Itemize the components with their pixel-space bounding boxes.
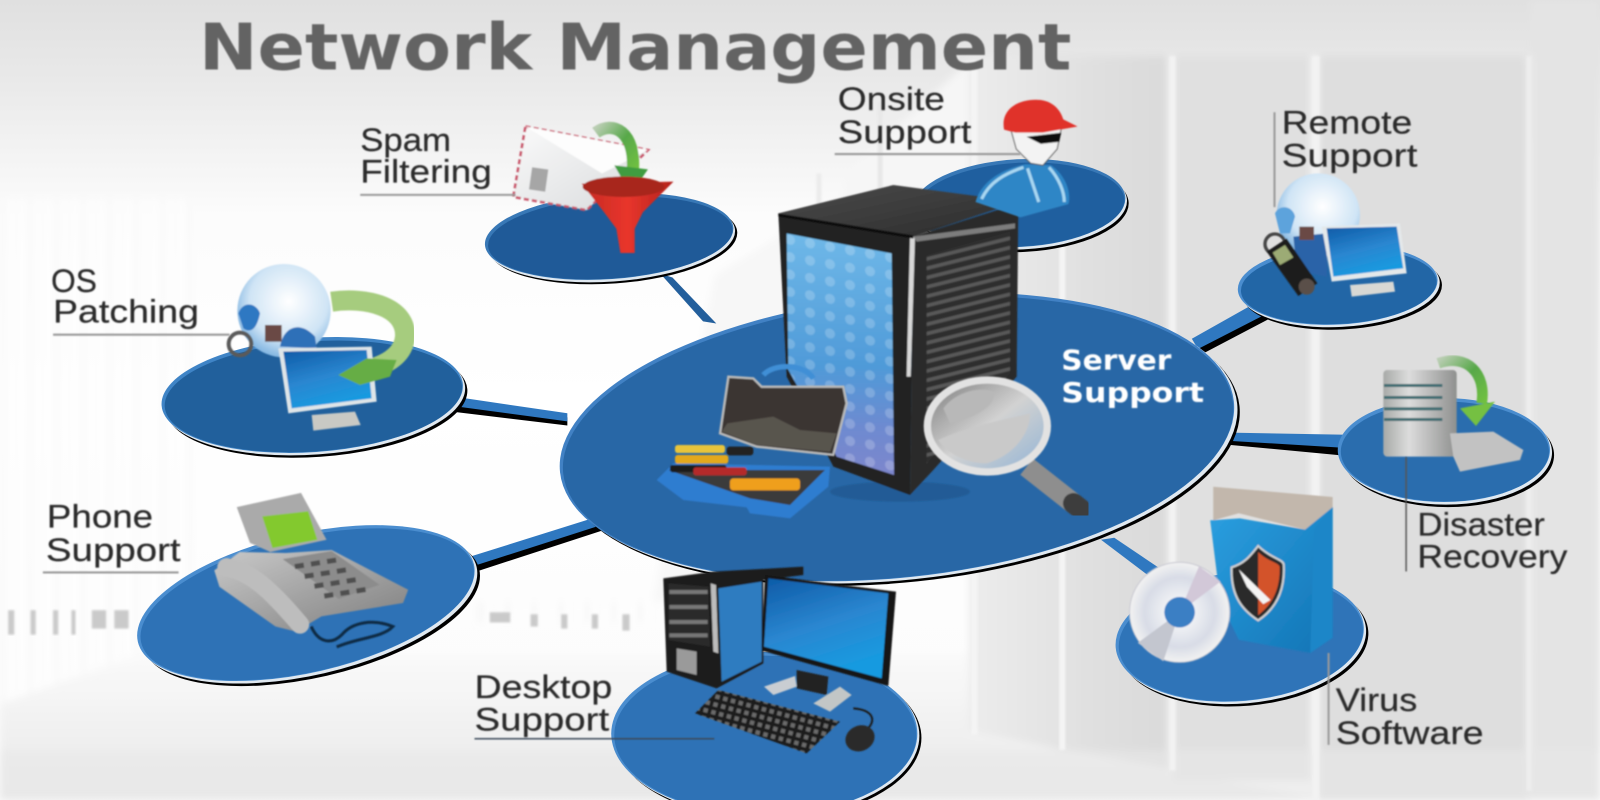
label: OS Patching: OS bbox=[51, 262, 97, 299]
panel: OS patching disc bbox=[158, 327, 471, 468]
connector: disaster recovery to server bbox=[1230, 433, 1347, 455]
label: Remote Support: Support bbox=[1282, 136, 1417, 173]
icon: remote support globe, phone and monitor bbox=[1265, 173, 1407, 297]
label: Phone Support: Phone bbox=[47, 498, 153, 535]
panel: desktop support disc bbox=[611, 652, 921, 800]
label: Disaster Recovery: Disaster bbox=[1417, 506, 1545, 543]
icon: OS patching globe, monitor and arrow bbox=[229, 264, 405, 431]
label: Disaster Recovery: Recovery bbox=[1417, 537, 1568, 574]
label: Spam Filtering: Filtering bbox=[360, 153, 492, 190]
label: Disaster Recovery bbox=[1406, 457, 1568, 574]
icon: onsite technician bbox=[976, 100, 1078, 217]
label: Onsite Support: Onsite bbox=[838, 80, 945, 117]
connector: spam to server bbox=[660, 273, 716, 323]
connector: virus software to server bbox=[1101, 538, 1161, 578]
panel: onsite support disc bbox=[911, 154, 1131, 258]
panel: spam filtering disc bbox=[482, 185, 740, 292]
icon: disaster recovery storage and arrow bbox=[1383, 361, 1523, 472]
icon: desktop computer bbox=[663, 567, 896, 756]
panel: remote support disc bbox=[1236, 240, 1444, 335]
label: Virus Software bbox=[1329, 653, 1484, 751]
label: Phone Support bbox=[43, 498, 181, 572]
label: Onsite Support bbox=[835, 80, 1020, 154]
label: Desktop Support bbox=[474, 668, 714, 739]
icon: toolbox bbox=[657, 367, 847, 518]
label: Remote Support: Remote bbox=[1282, 104, 1412, 141]
label: Spam Filtering bbox=[360, 121, 515, 195]
label: Spam Filtering: Spam bbox=[360, 121, 451, 158]
label: Desktop Support: Support bbox=[474, 701, 609, 738]
label: Remote Support bbox=[1274, 104, 1417, 207]
label: Server Support: Server bbox=[1061, 344, 1172, 376]
panel: phone support disc bbox=[122, 496, 495, 715]
label: Virus Software: Virus bbox=[1336, 681, 1417, 718]
connector: OS patching to server bbox=[449, 396, 567, 426]
label: Onsite Support: Support bbox=[838, 113, 971, 150]
label: Virus Software: Software bbox=[1336, 714, 1484, 751]
icon: magnifying glass bbox=[927, 380, 1081, 509]
icon: spam envelope and funnel bbox=[513, 127, 673, 253]
label: OS Patching: Patching bbox=[53, 292, 199, 329]
panel: virus software disc bbox=[1110, 562, 1374, 717]
connector: remote support to server bbox=[1192, 302, 1282, 353]
panel: server support central disc bbox=[545, 261, 1254, 617]
label: Desktop Support: Desktop bbox=[474, 668, 612, 705]
icon: server tower bbox=[778, 185, 1018, 502]
icon: desk phone bbox=[214, 493, 408, 647]
label: Phone Support: Support bbox=[46, 531, 181, 568]
title: Network Management bbox=[199, 10, 1071, 85]
label: Server Support bbox=[1061, 344, 1204, 409]
icon: virus software box, disc and shield bbox=[1130, 487, 1333, 662]
label: OS Patching bbox=[51, 262, 230, 335]
connector: phone to server bbox=[465, 515, 608, 572]
panel: disaster recovery disc bbox=[1338, 398, 1554, 507]
label: Server Support: Support bbox=[1061, 377, 1204, 409]
